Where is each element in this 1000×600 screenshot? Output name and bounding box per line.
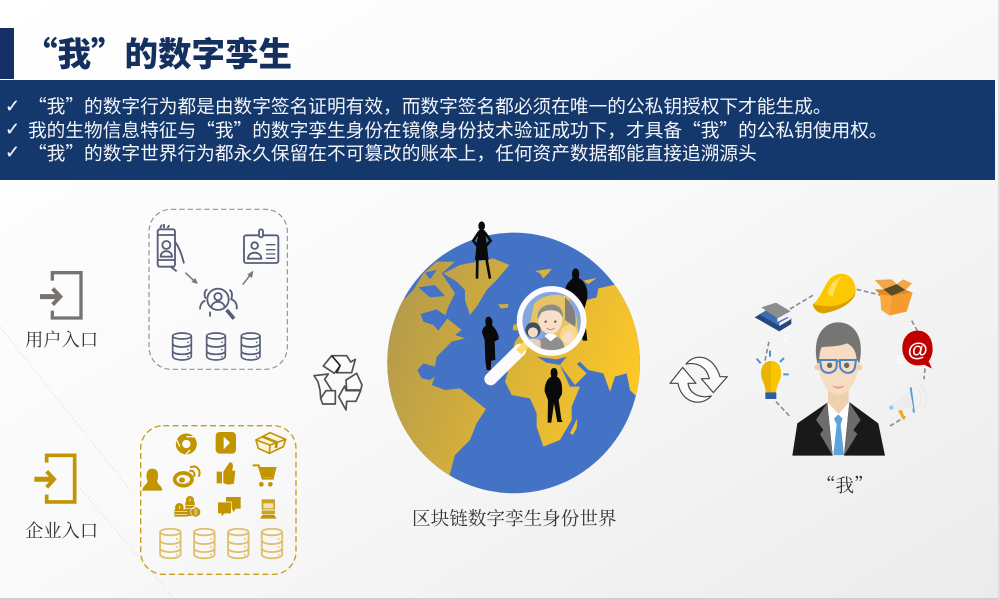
icon: weibo [175,467,200,486]
silhouette: atlantic person [482,317,499,370]
icon: books [755,303,791,331]
hudson bay and arctic water [418,270,448,331]
lens portraits [525,295,580,352]
icon: parcel [256,433,286,453]
silhouette: top woman [473,221,491,279]
magnifying glass [491,289,584,379]
faint number: 2 [782,332,789,346]
panel: user identity flow [149,209,287,369]
icon: sync arrows [670,357,727,402]
faint number: 5 [897,353,904,367]
icon: thumb up [217,462,235,485]
icon: ID badge [244,229,278,263]
point 1: “我”的数字行为都是由数字签名证明有效，而数字签名都必须在唯一的公私钥授权下才能生成。 [28,92,832,119]
icon: coins [174,496,201,517]
icon: identity search [200,289,237,319]
icon: video play [216,432,236,454]
point 3: ✓ [5,142,20,163]
silhouette: east man [565,268,588,341]
point 2: ✓ [5,119,20,140]
panel: enterprise data sources [141,426,296,574]
point 3: “我”的数字世界行为都永久保留在不可篡改的账本上，任何资产数据都能直接追溯源头 [28,139,757,166]
icon: recycle arrows [314,356,362,410]
icon: email at sign [902,331,933,369]
globe land masses [380,258,647,480]
figure: "me" with personal assets [755,274,933,456]
icon: enterprise entry [34,455,75,502]
icon: hard hat [813,274,856,313]
title accent block [0,28,14,79]
banner: key points [0,80,995,180]
arrow: phone to person [185,273,198,284]
icon: phone with hand [158,224,184,271]
icon: megaphone [889,385,927,419]
dashed ring [765,289,925,426]
icon: email at sign: @ [908,339,928,362]
icon: cardboard box [875,279,913,316]
icon: train [260,499,277,519]
point 1: ✓ [5,96,20,117]
title: “我”的数字孪生 [24,27,292,76]
icons: databases [160,529,282,558]
label: globe: 区块链数字孪生身份世界 [412,505,617,531]
label: enterprise entry: 企业入口 [25,517,98,543]
icons: databases [173,333,260,360]
icon: shopping cart [253,465,275,487]
icon: light bulb [757,351,789,399]
icon: chat bubbles [218,497,241,517]
label: me: “我” [817,472,873,498]
silhouette: africa man [545,368,563,423]
arrow: person to badge [243,271,253,285]
globe [380,221,647,493]
point 2: 我的生物信息特征与“我”的数字孪生身份在镜像身份技术验证成功下，才具备“我”的公私钥使用权。 [28,116,888,143]
label: user entry: 用户入口 [25,326,98,352]
icon: user entry [40,273,81,318]
icon: person [142,469,162,491]
icon: browser [176,437,195,455]
person portrait [792,322,885,456]
